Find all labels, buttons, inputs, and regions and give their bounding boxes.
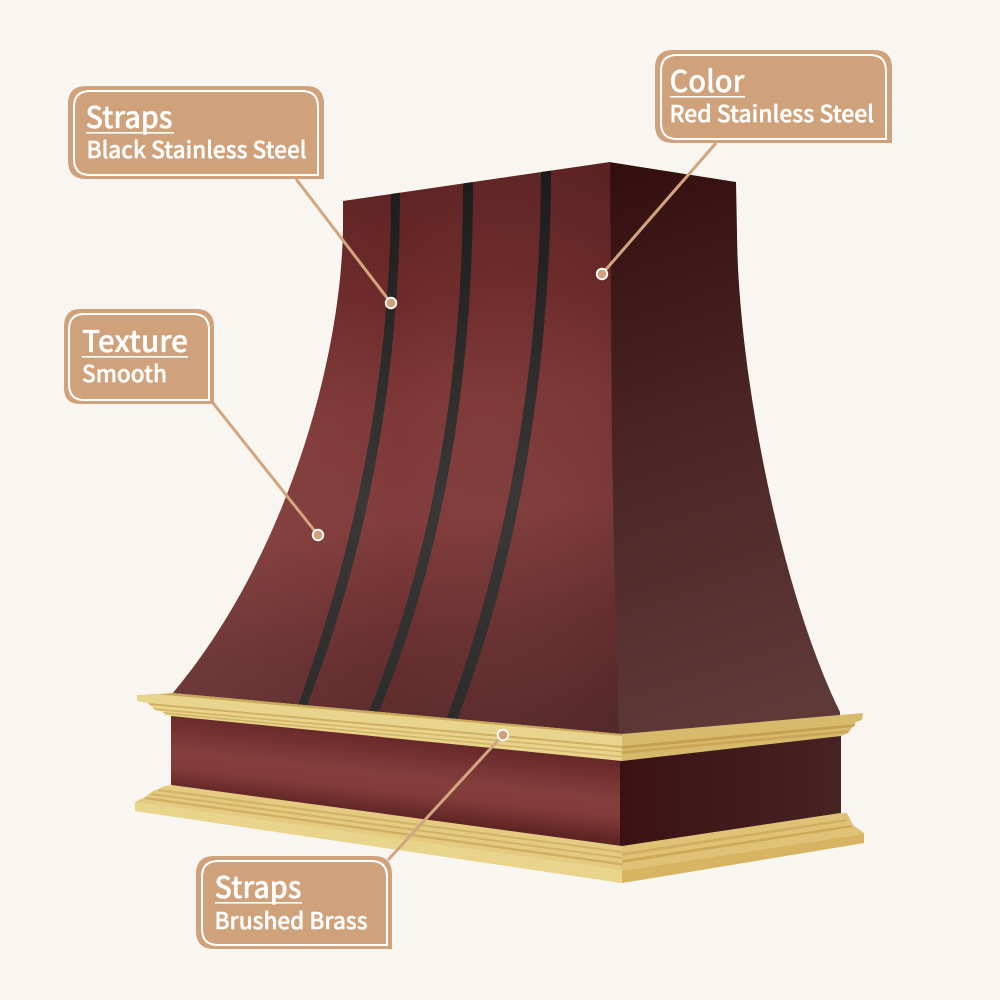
lower box side bbox=[620, 734, 841, 847]
hood front face bbox=[172, 162, 619, 736]
leader line: texture bbox=[213, 403, 318, 535]
callout: texture: Smooth bbox=[82, 355, 167, 389]
callout: straps black stainless steel: Black Stainless Steel bbox=[86, 131, 307, 165]
hood side face bbox=[609, 162, 840, 736]
leader line: straps brass bbox=[388, 735, 503, 860]
callout: color bbox=[655, 50, 892, 143]
dot: color bbox=[597, 269, 607, 279]
lower box front bbox=[171, 714, 620, 847]
upper brass moulding bbox=[137, 693, 863, 761]
lower brass moulding bbox=[135, 785, 864, 883]
leader line: straps black bbox=[296, 179, 391, 303]
callout: color: Color bbox=[670, 57, 745, 101]
callout: straps black stainless steel bbox=[68, 86, 324, 179]
callout: straps black stainless steel: Straps bbox=[86, 93, 172, 137]
callout: straps brushed brass bbox=[196, 856, 392, 949]
leader line: color bbox=[602, 143, 716, 274]
callout: texture bbox=[64, 309, 214, 404]
range hood bbox=[135, 162, 864, 883]
callout: straps brushed brass: Brushed Brass bbox=[214, 902, 368, 936]
black straps bbox=[297, 169, 551, 720]
dot: texture bbox=[313, 530, 323, 540]
callout: texture: Texture bbox=[82, 317, 188, 361]
callout: straps brushed brass: Straps bbox=[214, 863, 302, 907]
dot: straps brass bbox=[498, 730, 508, 740]
dot: straps black bbox=[386, 298, 396, 308]
callout: color: Red Stainless Steel bbox=[670, 95, 874, 129]
